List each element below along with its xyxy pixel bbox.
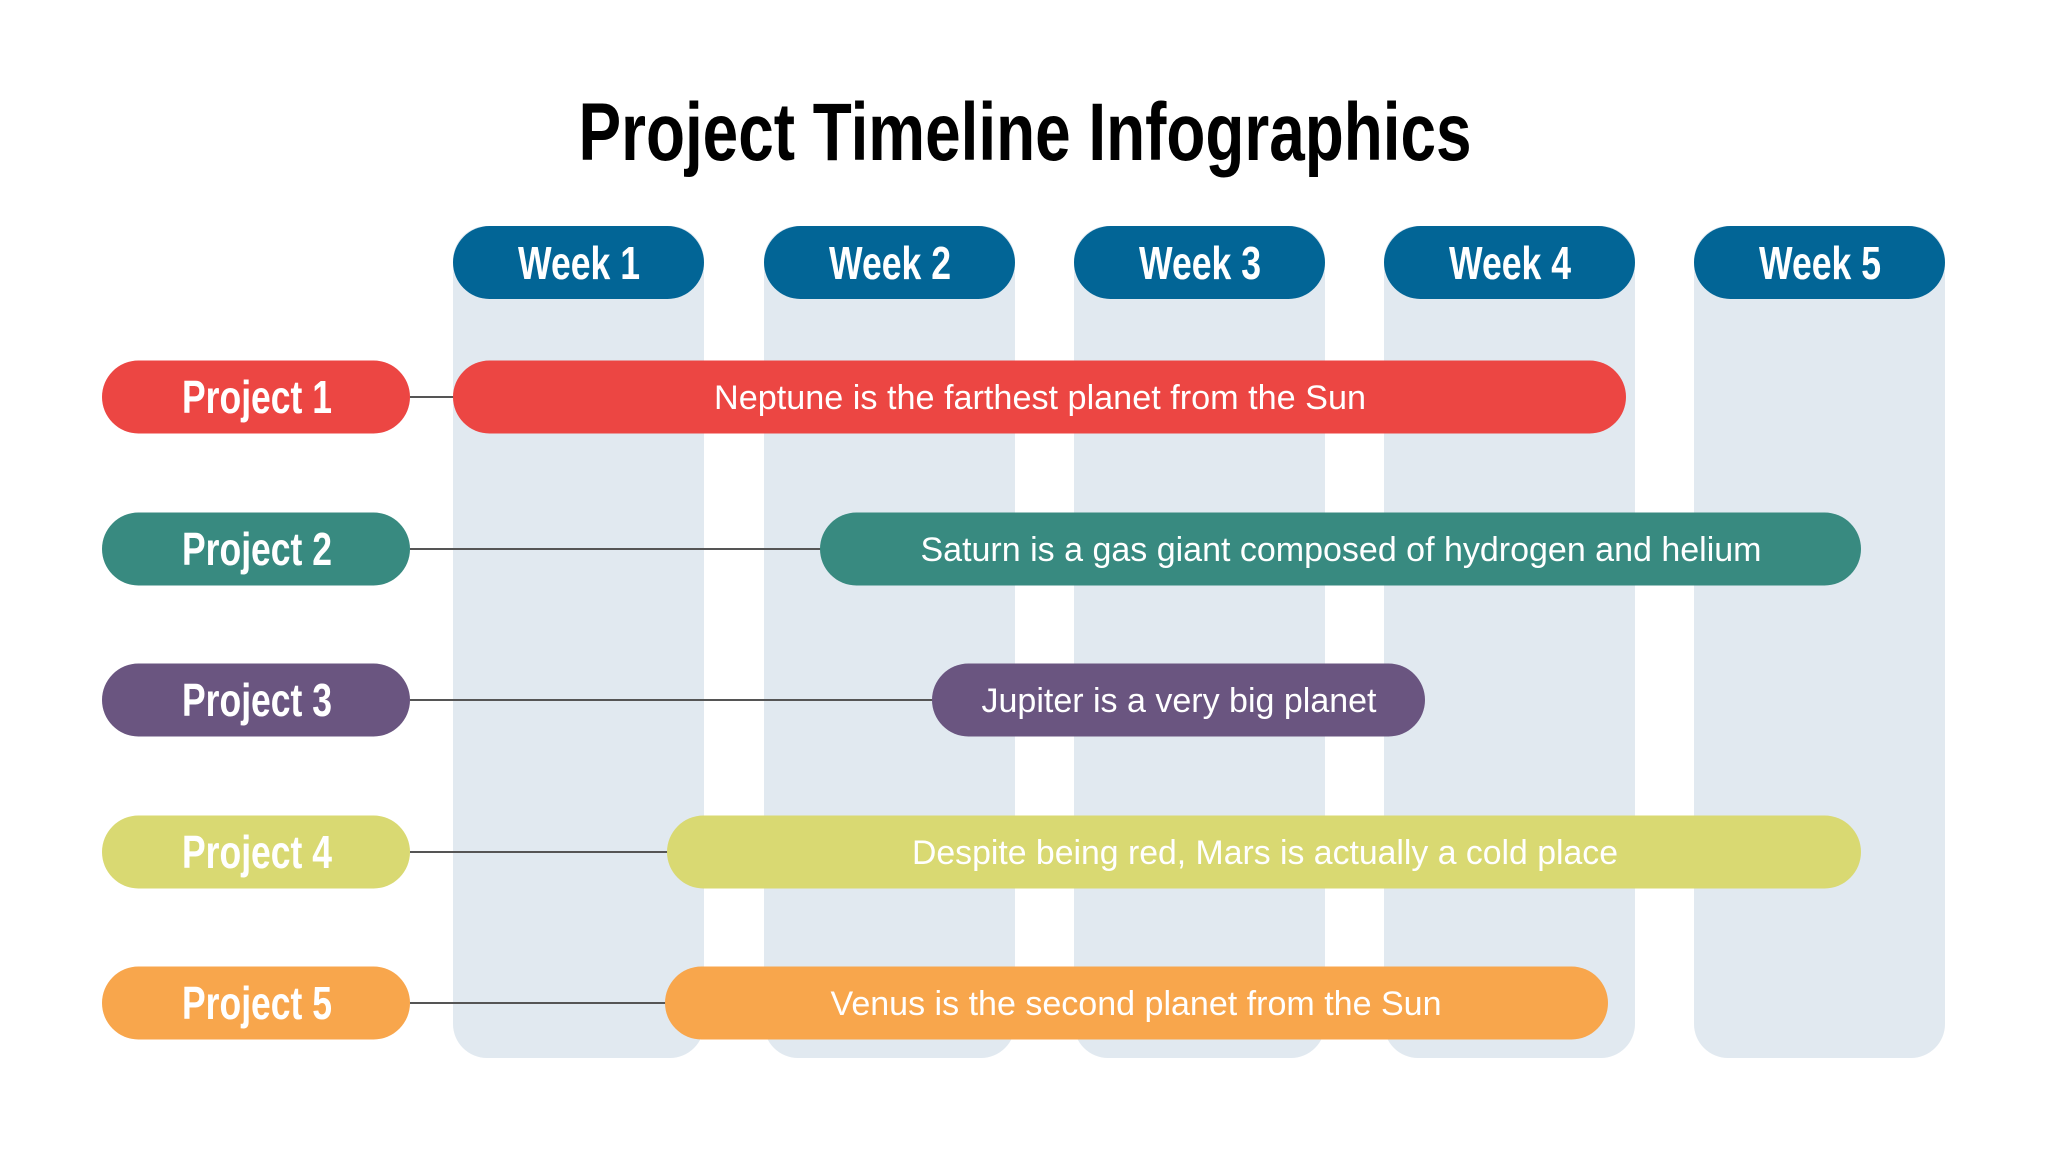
row: project 3 [102, 664, 1425, 736]
row: project 5: Venus is the second planet from the Sun [830, 985, 1442, 1023]
row: project 3: Project 3 [182, 674, 332, 726]
column: week 2 [764, 226, 1015, 1058]
column: week 4: Week 4 [1449, 237, 1571, 289]
row: project 1 [102, 360, 1626, 434]
column: week 4 [1384, 226, 1635, 1058]
row: project 1: Project 1 [182, 371, 332, 423]
row: project 4: Despite being red, Mars is actually a cold place [912, 834, 1618, 872]
row: project 3: Jupiter is a very big planet [982, 682, 1377, 720]
row: project 5: Project 5 [182, 977, 332, 1029]
week columns [453, 226, 1945, 1058]
row: project 2: Saturn is a gas giant composed of hydrogen and helium [920, 531, 1762, 569]
column: week 5: Week 5 [1759, 237, 1881, 289]
column: week 1: Week 1 [518, 237, 640, 289]
row: project 2 [102, 512, 1861, 586]
row: project 5 [102, 966, 1608, 1040]
column: week 3 [1074, 226, 1325, 1058]
row: project 2: Project 2 [182, 523, 332, 575]
column: week 2: Week 2 [829, 237, 951, 289]
row: project 4: Project 4 [182, 826, 332, 878]
title: Project Timeline Infographics [578, 87, 1472, 178]
row: project 1: Neptune is the farthest planet from the Sun [714, 379, 1366, 417]
row: project 4 [102, 816, 1861, 888]
column: week 1 [453, 226, 704, 1058]
column: week 5 [1694, 226, 1945, 1058]
column: week 3: Week 3 [1139, 237, 1261, 289]
